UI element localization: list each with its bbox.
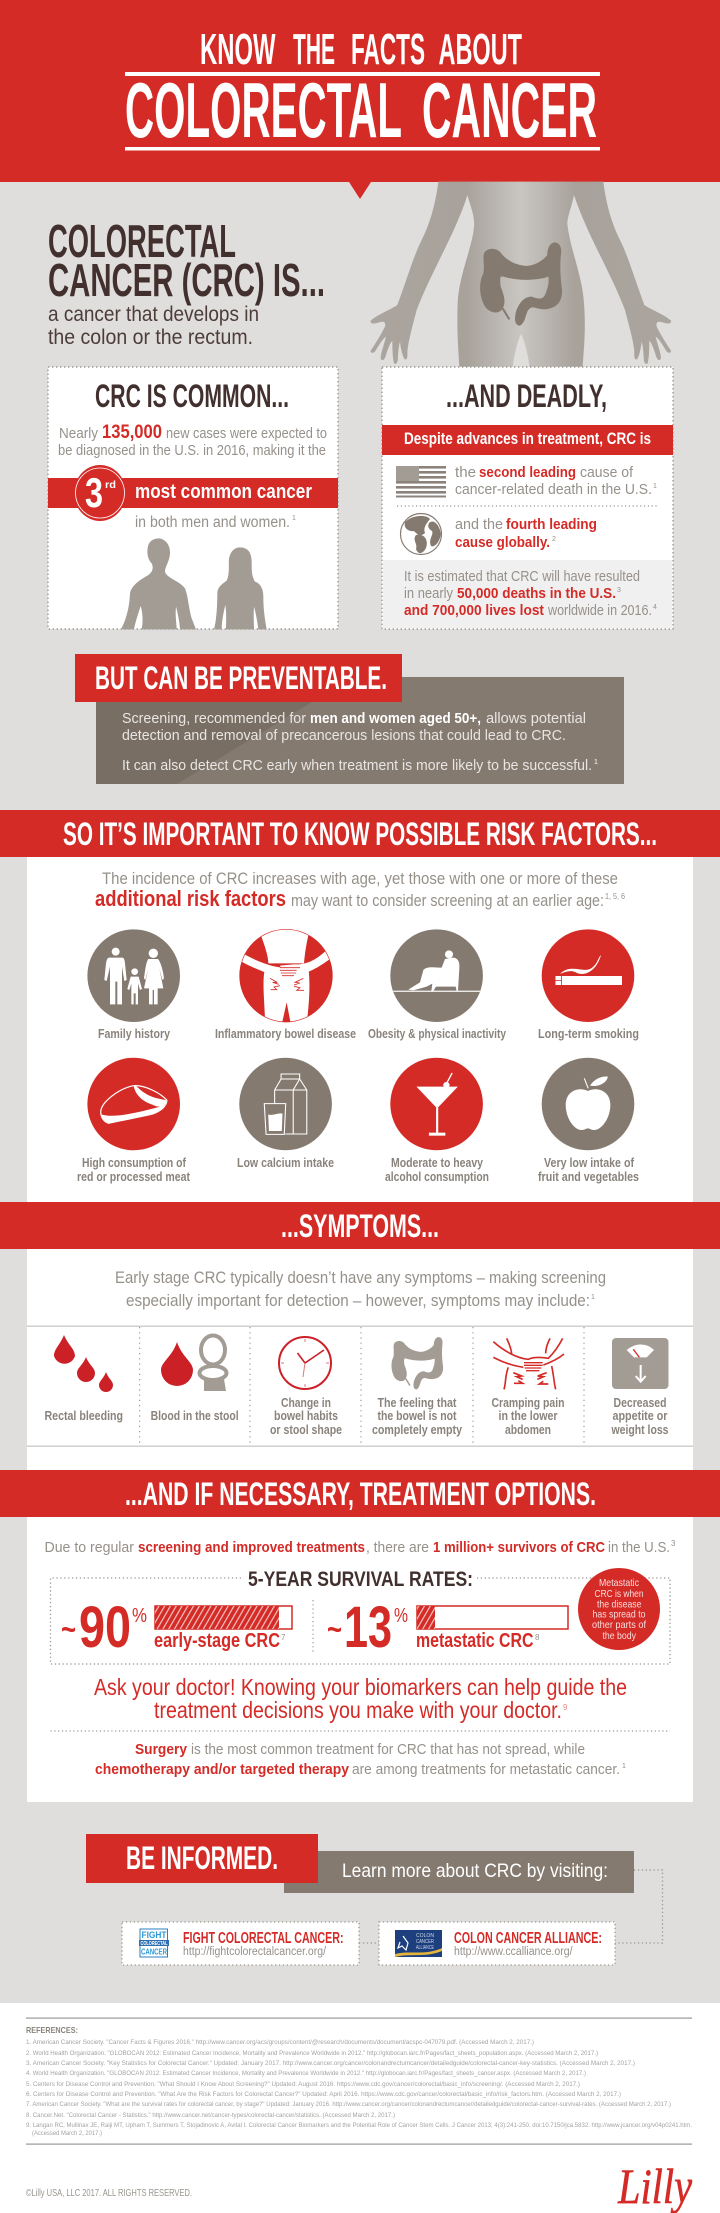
- survival rates box: [50, 1568, 670, 1664]
- panel: CRC is common: Nearly: [59, 426, 99, 442]
- panel: be informed: [86, 1834, 662, 1965]
- intro heading: [48, 215, 325, 349]
- panel: and deadly: 2: [552, 536, 556, 543]
- panel: and deadly: 3: [617, 587, 621, 594]
- references: 1. American Cancer Society. "Cancer Facts & Figures 2016." http://www.cancer.org/acs/groups/content/@research/documents/document/acspc-047079.pdf. (Accessed March 2, 2017.): [26, 2039, 534, 2046]
- panel: and deadly: cancer-related death in the U.S.: [455, 482, 652, 498]
- intro heading: a cancer that develops in: [48, 303, 259, 326]
- panel: treatment options: Due to regular: [44, 1539, 134, 1556]
- panel: risk factors: 1, 5, 6: [605, 892, 625, 901]
- panel: CRC is common: 1: [292, 515, 296, 522]
- references: (Accessed March 2, 2017.): [32, 2130, 102, 2137]
- risk factor labels: Long-term smoking: [538, 1027, 639, 1041]
- references: 2. World Health Organization. "GLOBOCAN 2012: Estimated Cancer Incidence, Mortality and Prevalence Worldwide in 2012." http://globocan.iarc.fr/Pages/fact_sheets_population.aspx. (Accessed March 2, 2017.): [26, 2050, 598, 2057]
- callout: metastatic definition: other parts of: [592, 1619, 646, 1631]
- panel: treatment options: is the most common treatment for CRC that has not spread, while: [191, 1742, 585, 1758]
- icon: blood in the stool: [161, 1336, 226, 1391]
- stat: 90 percent early-stage: %: [132, 1605, 147, 1627]
- stat: 90 percent early-stage: 90: [79, 1595, 131, 1660]
- panel: symptoms: 1: [591, 1294, 595, 1301]
- panel: symptoms: especially important for detection – however, symptoms may include:: [126, 1291, 590, 1310]
- icon: cramping pain: [493, 1338, 564, 1389]
- header banner: [0, 0, 720, 199]
- panel: and deadly: [382, 367, 673, 629]
- panel: and deadly: and 700,000 lives lost: [404, 603, 544, 619]
- symptom labels: The feeling that: [378, 1396, 457, 1410]
- icon: colon cancer alliance logo: CANCER: [416, 1939, 434, 1945]
- references: 3. American Cancer Society. "Key Statistics for Colorectal Cancer." Updated: January 2017. http://www.cancer.org/cancer/colonandrectumcancer/detailedguide/colorectal-cancer-key-statistics. (Accessed March 2, 2017.): [26, 2060, 635, 2067]
- callout: metastatic definition: has spread to: [592, 1609, 646, 1621]
- callout: metastatic definition: [578, 1568, 660, 1650]
- link: fight colorectal cancer: FIGHT COLORECTAL CANCER:: [183, 1930, 344, 1947]
- panel: symptoms: [27, 1249, 693, 1470]
- panel: CRC is common: 135,000: [102, 422, 162, 443]
- callout: ask your doctor: [94, 1674, 627, 1723]
- panel: treatment options: screening and improved treatments: [138, 1539, 365, 1556]
- stat: 90 percent early-stage: [61, 1595, 292, 1660]
- link: colon cancer alliance: COLON CANCER ALLIANCE:: [454, 1930, 602, 1947]
- panel: and deadly: cause globally.: [455, 535, 550, 551]
- panel: CRC is common: CRC IS COMMON...: [95, 378, 289, 414]
- callout: metastatic definition: the body: [602, 1630, 637, 1642]
- heading band: treatment options: [0, 1470, 720, 1517]
- symptom labels: weight loss: [611, 1423, 669, 1437]
- callout: metastatic definition: the disease: [597, 1598, 642, 1610]
- icon: fight colorectal cancer logo: FIGHT: [142, 1930, 167, 1940]
- panel: but can be preventable: allows potential: [486, 711, 586, 727]
- panel: symptoms: Early stage CRC typically doesn’t have any symptoms – making screening: [115, 1268, 606, 1287]
- risk factor labels: alcohol consumption: [385, 1170, 489, 1184]
- icon: red or processed meat: [87, 1058, 180, 1150]
- panel: risk factors: additional risk factors: [95, 886, 286, 911]
- icon: fight colorectal cancer logo: [139, 1929, 169, 1957]
- panel: risk factors: The incidence of CRC increases with age, yet those with one or more of these: [102, 869, 618, 888]
- callout: metastatic definition: Metastatic: [599, 1577, 639, 1589]
- references: 4. World Health Organization. "GLOBOCAN 2012: Estimated Cancer Incidence, Mortality and Prevalence Worldwide in 2012." http://globocan.iarc.fr/Pages/fact_sheets_cancer.aspx. (Accessed March 2, 2017.): [26, 2070, 586, 2077]
- heading band: risk factors: [0, 810, 720, 857]
- title line: know the facts about: [200, 26, 522, 74]
- panel: CRC is common: new cases were expected to: [166, 426, 327, 442]
- panel: and deadly: cause of: [580, 465, 634, 481]
- panel: but can be preventable: Screening, recommended for: [122, 711, 306, 727]
- symptom labels: Decreased: [614, 1396, 666, 1410]
- link: colon cancer alliance: http://www.ccalliance.org/: [454, 1946, 573, 1958]
- icon: colon cancer alliance logo: COLON: [416, 1933, 434, 1939]
- callout: ask your doctor: Ask your doctor! Knowing your biomarkers can help guide the: [94, 1674, 627, 1700]
- panel: treatment options: chemotherapy and/or targeted therapy: [95, 1762, 349, 1778]
- references: 6. Centers for Disease Control and Prevention. "What Are the Risk Factors for Colorectal Cancer?" Updated: April 2016. https://www.cdc.gov/cancer/colorectal/basic_info/risk_factors.htm. (Accessed March 2, 2017.): [26, 2091, 621, 2098]
- icon: globe: [400, 514, 442, 554]
- heading band: symptoms: [0, 1202, 720, 1249]
- symptom labels: [44, 1396, 669, 1437]
- title line: know the facts about: ABOUT: [438, 26, 522, 74]
- panel: and deadly: second leading: [479, 465, 576, 481]
- band: 3rd most common cancer: rd: [105, 480, 116, 491]
- icon: colon: [391, 1337, 443, 1389]
- panel: and deadly: ...AND DEADLY,: [446, 378, 607, 414]
- panel: and deadly: in nearly: [404, 586, 454, 602]
- panel: treatment options: [27, 1517, 693, 1802]
- stat: 90 percent early-stage: early-stage CRC: [154, 1630, 280, 1652]
- icon: low calcium intake: [239, 1058, 332, 1150]
- panel: CRC is common: in both men and women.: [135, 514, 290, 531]
- panel: and deadly: the: [455, 465, 476, 481]
- panel: and deadly: It is estimated that CRC will have resulted: [404, 569, 640, 585]
- panel: treatment options: Surgery: [135, 1742, 187, 1758]
- symptom labels: the bowel is not: [378, 1409, 457, 1423]
- risk factor labels: Obesity & physical inactivity: [368, 1027, 506, 1041]
- panel: and deadly: 50,000 deaths in the U.S.: [457, 586, 616, 602]
- risk factor labels: Moderate to heavy: [391, 1156, 483, 1170]
- risk factor labels: Inflammatory bowel disease: [215, 1027, 356, 1041]
- survival rates box: 5-YEAR SURVIVAL RATES:: [248, 1568, 473, 1591]
- band: 3rd most common cancer: 3: [85, 469, 103, 516]
- intro heading: COLORECTAL: [48, 215, 236, 267]
- risk factor labels: Family history: [98, 1027, 170, 1041]
- link: fight colorectal cancer: [122, 1922, 359, 1965]
- body silhouette with colon: [371, 182, 671, 367]
- panel: but can be preventable: [75, 654, 624, 784]
- symptom labels: Blood in the stool: [151, 1409, 239, 1423]
- risk factor labels: Low calcium intake: [237, 1156, 334, 1170]
- stat: 90 percent early-stage: ~: [61, 1611, 76, 1647]
- symptom labels: bowel habits: [274, 1409, 338, 1423]
- panel: but can be preventable: detection and removal of precancerous lesions that could lead to CRC.: [122, 728, 566, 744]
- stat: 13 percent metastatic: 13: [344, 1595, 392, 1660]
- callout: metastatic definition: CRC is when: [594, 1588, 644, 1600]
- symptom labels: Rectal bleeding: [44, 1409, 123, 1423]
- icon: fight colorectal cancer logo: CANCER: [141, 1948, 167, 1956]
- title line: know the facts about: FACTS: [351, 26, 425, 74]
- stat: 90 percent early-stage: 7: [281, 1633, 286, 1642]
- title line: know the facts about: KNOW: [200, 26, 276, 74]
- symptom labels: Change in: [281, 1396, 331, 1410]
- risk factor labels: [77, 1027, 639, 1184]
- panel: treatment options: in the U.S.: [608, 1539, 670, 1556]
- stat: 13 percent metastatic: 8: [535, 1633, 540, 1642]
- panel: be informed: Learn more about CRC by visiting:: [342, 1860, 608, 1882]
- references: [26, 2018, 692, 2145]
- symptom labels: appetite or: [612, 1409, 668, 1423]
- icon: family history: [87, 929, 180, 1022]
- symptom labels: Cramping pain: [492, 1396, 564, 1410]
- title line: know the facts about: THE: [293, 26, 335, 74]
- panel: and deadly: fourth leading: [506, 517, 597, 533]
- icon: inflammatory bowel disease: [238, 928, 333, 1023]
- symptom labels: in the lower: [498, 1409, 558, 1423]
- callout: ask your doctor: 9: [563, 1703, 568, 1712]
- panel: treatment options: 1 million+ survivors of CRC: [433, 1539, 605, 1556]
- panel: and deadly: 4: [653, 604, 657, 611]
- icon: weight scale: [612, 1338, 668, 1389]
- icon: colon cancer alliance logo: [395, 1930, 442, 1957]
- risk factor labels: High consumption of: [82, 1156, 187, 1170]
- stat: 13 percent metastatic: ~: [327, 1611, 342, 1647]
- references: 5. Centers for Disease Control and Prevention. "What Should I Know About Screening?" Updated: August 2016. https://www.cdc.gov/cancer/colorectal/basic_info/screening/. (Accessed March 2, 2017.): [26, 2081, 580, 2088]
- link: colon cancer alliance: [379, 1922, 615, 1965]
- title line: colorectal cancer: COLORECTAL: [125, 66, 402, 154]
- band: 3rd most common cancer: [48, 465, 338, 521]
- panel: and deadly: 1: [653, 483, 657, 490]
- icon: fight colorectal cancer logo: COLORECTAL: [140, 1941, 168, 1947]
- icon: colon cancer alliance logo: ALLIANCE: [416, 1945, 434, 1951]
- icon: obesity and inactivity: [390, 929, 483, 1022]
- symptom labels: or stool shape: [270, 1423, 342, 1437]
- copyright: ©Lilly USA, LLC 2017. ALL RIGHTS RESERVED.: [26, 2187, 192, 2199]
- icon: long-term smoking: [542, 929, 634, 1022]
- panel: be informed: BE INFORMED.: [126, 1840, 278, 1876]
- panel: risk factors: [27, 857, 693, 1202]
- icon: alcohol: [390, 1058, 483, 1150]
- icon: clock: [279, 1337, 331, 1389]
- panel: treatment options: 3: [671, 1539, 676, 1548]
- link: fight colorectal cancer: http://fightcolorectalcancer.org/: [183, 1946, 327, 1958]
- panel: CRC is common: [48, 367, 338, 629]
- panel: CRC is common: be diagnosed in the U.S. in 2016, making it the: [58, 443, 326, 459]
- intro heading: CANCER (CRC) IS...: [48, 254, 325, 306]
- stat: 13 percent metastatic: [327, 1595, 568, 1660]
- references: 7. American Cancer Society. "What are the survival rates for colorectal cancer, by stage?" Updated: January 2016. http://www.cancer.org/cancer/colonandrectumcancer/detailedguide/colorectal-cancer-survival-rates. (Accessed March 2, 2017.): [26, 2101, 671, 2108]
- logo: Lilly: Lilly: [617, 2158, 693, 2213]
- panel: risk factors: may want to consider screening at an earlier age:: [291, 892, 604, 910]
- panel: and deadly: and the: [455, 517, 503, 533]
- intro heading: the colon or the rectum.: [48, 326, 253, 349]
- stat: 13 percent metastatic: %: [394, 1605, 408, 1627]
- panel: but can be preventable: It can also detect CRC early when treatment is more likely to be successful.: [122, 758, 592, 774]
- icon: US flag: [396, 466, 446, 498]
- panel: but can be preventable: BUT CAN BE PREVENTABLE.: [95, 660, 387, 696]
- panel: treatment options: 1: [622, 1763, 626, 1770]
- references: REFERENCES:: [26, 2025, 78, 2035]
- band: despite advances: [382, 425, 673, 455]
- band: despite advances: Despite advances in treatment, CRC is: [404, 429, 651, 448]
- panel: treatment options: are among treatments for metastatic cancer.: [352, 1762, 620, 1778]
- icon: fruit and vegetables: [542, 1058, 634, 1150]
- band: 3rd most common cancer: most common cancer: [135, 481, 312, 503]
- risk factor labels: Very low intake of: [544, 1156, 635, 1170]
- risk factor labels: red or processed meat: [77, 1170, 191, 1184]
- icon: rectal bleeding drops: [54, 1335, 113, 1392]
- symptom labels: abdomen: [505, 1423, 551, 1437]
- panel: but can be preventable: men and women aged 50+,: [310, 711, 481, 727]
- panel: but can be preventable: 1: [594, 759, 598, 766]
- heading band: symptoms: ...SYMPTOMS...: [281, 1208, 439, 1244]
- icon: man and woman silhouettes: [121, 538, 267, 629]
- callout: ask your doctor: treatment decisions you make with your doctor.: [154, 1697, 562, 1723]
- panel: and deadly: worldwide in 2016.: [547, 603, 652, 619]
- symptom labels: completely empty: [372, 1423, 462, 1437]
- panel: treatment options: , there are: [366, 1539, 429, 1556]
- risk factor labels: fruit and vegetables: [538, 1170, 639, 1184]
- stat: 13 percent metastatic: metastatic CRC: [416, 1630, 534, 1652]
- references: 8. Cancer.Net. "Colorectal Cancer - Statistics." http://www.cancer.net/cancer-types/colorectal-cancer/statistics. (Accessed March 2, 2017.): [26, 2112, 395, 2119]
